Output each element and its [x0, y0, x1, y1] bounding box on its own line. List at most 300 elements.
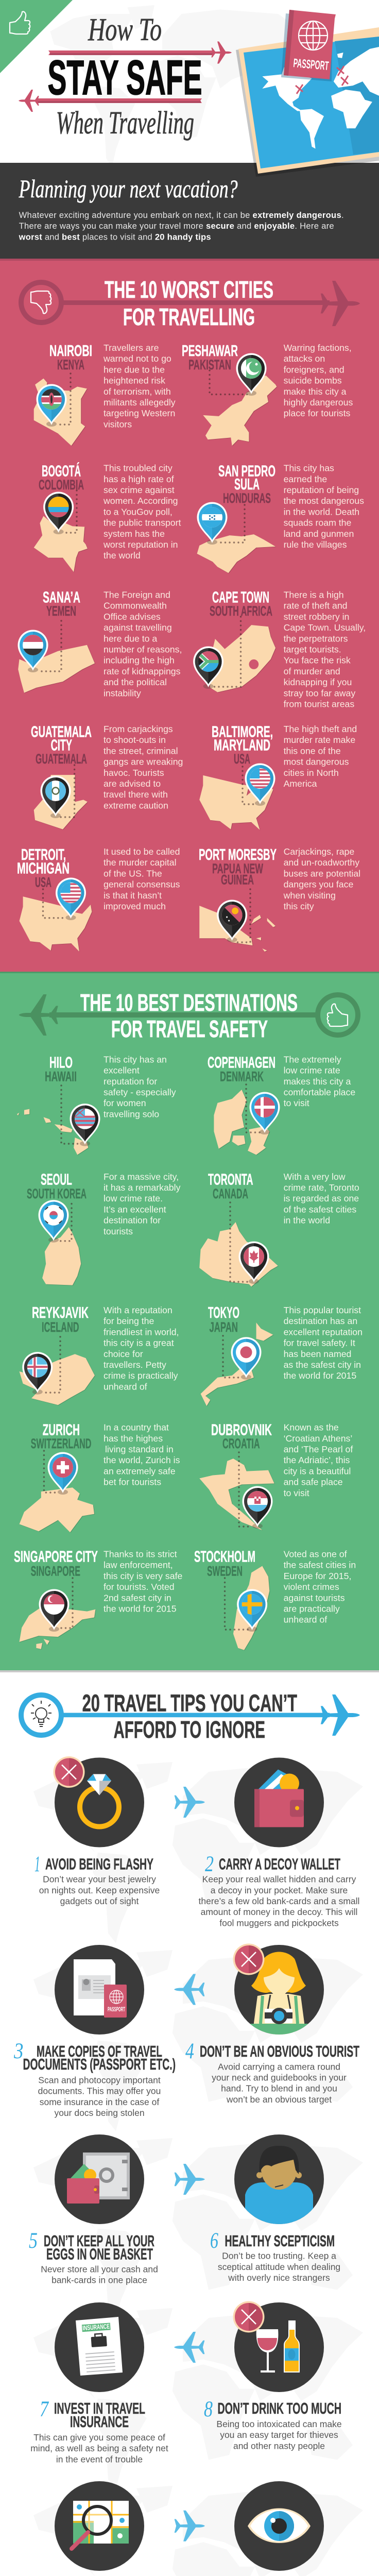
description: rate of kidnappings — [104, 666, 181, 676]
tip 8 — [204, 2397, 342, 2451]
description: extreme caution — [104, 800, 168, 810]
map of Kenya — [34, 379, 87, 446]
description: worst reputation in — [103, 539, 178, 550]
plane — [175, 2164, 205, 2195]
city: Cape Town — [193, 588, 366, 709]
map markers — [296, 66, 348, 94]
description: sex crime against — [104, 485, 175, 495]
description: buses are potential — [284, 868, 360, 878]
flag pin — [236, 353, 267, 396]
flag pin — [245, 764, 275, 806]
description: reputation of being — [284, 485, 359, 495]
mini passport — [104, 1985, 127, 2018]
flag pin — [47, 1452, 78, 1495]
description: place for tourists — [284, 408, 351, 418]
country: SOUTH KOREA — [27, 1186, 87, 1201]
title line: STAY SAFE: STAY SAFE — [47, 50, 202, 105]
tip title line 2: INSURANCE — [70, 2413, 129, 2431]
country: PAKISTAN — [188, 357, 231, 372]
tip text: Avoid carrying a camera round — [218, 2061, 340, 2072]
tip text: Being too intoxicated can make — [216, 2419, 342, 2429]
tip 2 — [199, 1852, 359, 1928]
description: travellers. Petty — [104, 1360, 166, 1370]
description: of the US. The — [104, 868, 162, 878]
description: to visit — [284, 1098, 309, 1108]
description: unheard of — [284, 1615, 327, 1625]
map of Japan — [201, 1323, 273, 1406]
description: The high theft and — [284, 724, 357, 734]
tip text: on nights out. Keep expensive — [39, 1885, 160, 1895]
flag pin — [22, 1352, 53, 1395]
description: The extremely — [284, 1054, 341, 1064]
flag pin — [43, 492, 74, 534]
description: instability — [104, 688, 141, 698]
city name: SAN PEDRO — [218, 462, 275, 480]
city name: BALTIMORE, — [212, 723, 273, 741]
description: In a country that — [104, 1422, 169, 1433]
description: This city has an — [104, 1054, 167, 1064]
description: has a high rate of — [104, 474, 174, 484]
map of Croatia — [199, 1459, 274, 1530]
icon: decoy wallet — [234, 1758, 324, 1848]
description: Office advises — [104, 612, 161, 622]
description: America — [284, 778, 317, 789]
city: Copenhagen — [208, 1054, 355, 1155]
tip text: fool muggers and pickpockets — [219, 1918, 339, 1928]
description: and un-roadworthy — [284, 857, 359, 868]
tip title: DON’T KEEP ALL YOUR — [44, 2232, 154, 2250]
description: of terrorism, with — [104, 386, 171, 397]
description: bet for tourists — [104, 1477, 161, 1487]
description: destination for — [104, 1215, 161, 1226]
country: USA — [234, 751, 250, 767]
world map illustration — [236, 10, 379, 177]
city name: CAPE TOWN — [212, 588, 269, 606]
city: Baltimore — [199, 723, 357, 830]
description: the most dangerous — [284, 496, 364, 506]
description: excellent reputation — [284, 1327, 363, 1337]
icon: sceptical man — [234, 2134, 324, 2224]
heading text line 2: AFFORD TO IGNORE — [114, 1716, 265, 1743]
map of Yemen — [18, 645, 95, 693]
number: 8 — [204, 2397, 213, 2421]
description: destination has an — [284, 1316, 357, 1326]
heading: worst cities — [21, 276, 360, 330]
description: this city is very safe — [104, 1571, 182, 1581]
city: Stockholm — [194, 1548, 356, 1650]
description: to visit — [284, 1488, 309, 1498]
tip text: bank-cards in one place — [51, 2275, 147, 2285]
tip 7 — [30, 2397, 168, 2464]
description: the murder capital — [104, 857, 177, 868]
city: Hilo — [17, 1054, 176, 1155]
map of Sweden — [233, 1566, 269, 1650]
description: and the political — [104, 677, 167, 687]
description: 2nd safest city in — [104, 1592, 171, 1603]
map of Iceland — [20, 1354, 95, 1405]
tip title line 2: DOCUMENTS (PASSPORT ETC.) — [23, 2055, 176, 2073]
tip 1 — [35, 1852, 160, 1906]
description: for travel safety. It — [284, 1338, 355, 1348]
description: travel there with — [104, 789, 168, 800]
description: Carjackings, rape — [284, 846, 354, 857]
tip title: AVOID BEING FLASHY — [45, 1855, 153, 1873]
tip text: mind, as well as being a safety net — [30, 2443, 168, 2453]
flag pin — [217, 900, 247, 942]
icon: globe — [299, 21, 328, 50]
description: for being the — [104, 1316, 154, 1326]
description: murder rate make — [284, 735, 355, 745]
description: here due to the — [104, 364, 165, 375]
city: Tokyo — [201, 1303, 363, 1406]
description: Warring factions, — [284, 343, 352, 353]
description: crime rate, Toronto — [284, 1182, 359, 1193]
tip title: INVEST IN TRAVEL — [54, 2399, 145, 2417]
city name: DUBROVNIK — [211, 1421, 272, 1439]
flag pin — [237, 1589, 267, 1632]
icon: safe and wallet — [55, 2134, 144, 2224]
country: ICELAND — [42, 1319, 79, 1335]
city: Bogota — [34, 462, 181, 572]
description: gangs are wreaking — [104, 757, 183, 767]
country: PAPUA NEW — [212, 861, 263, 876]
tip title: MAKE COPIES OF TRAVEL — [37, 2042, 162, 2060]
country: KENYA — [57, 357, 84, 372]
plane — [321, 281, 360, 326]
city name: PORT MORESBY — [199, 845, 277, 863]
country: HONDURAS — [223, 490, 271, 506]
description: Thanks to its strict — [104, 1549, 177, 1559]
city name: TORONTA — [208, 1171, 253, 1189]
city: Reykjavik — [20, 1303, 179, 1405]
description: From carjackings — [104, 724, 173, 734]
description: rate of theft and — [284, 601, 348, 611]
description: choice for — [104, 1349, 143, 1359]
faint world map watermark — [50, 5, 298, 167]
description: unheard of — [104, 1381, 147, 1392]
icon: insurance document — [55, 2302, 144, 2392]
description: are practically — [284, 1603, 340, 1614]
city: Peshawar — [182, 342, 353, 446]
bottom ribbon with plane — [19, 90, 202, 112]
city name line 2: CITY — [51, 736, 72, 754]
description: highly dangerous — [284, 397, 353, 408]
description: comfortable place — [284, 1087, 355, 1097]
city: San Pedro Sula — [197, 462, 364, 573]
description: city is a beautiful — [284, 1466, 351, 1476]
flag pin — [38, 1200, 69, 1243]
description: It’s an excellent — [104, 1204, 166, 1214]
map of Hawaii — [17, 1109, 88, 1155]
tip 5 — [29, 2229, 158, 2285]
tip text: Don’t be too trusting. Keep a — [222, 2251, 336, 2261]
tip text: documents. This may offer you — [38, 2086, 161, 2096]
description: women. According — [103, 496, 178, 506]
city name: ZURICH — [43, 1421, 80, 1439]
tip text: your docs being stolen — [54, 2108, 145, 2118]
intro text: There are ways you can make your travel more secure and enjoyable. Here are — [19, 221, 334, 231]
intro heading: Planning your next vacation? — [19, 174, 238, 203]
route dots — [210, 370, 247, 395]
tip text: sceptical attitude when dealing — [218, 2262, 340, 2272]
tip text: Never store all your cash and — [41, 2264, 158, 2274]
description: With a reputation — [104, 1305, 173, 1315]
icon: light bulb — [21, 1695, 61, 1735]
map of Singapore — [20, 1607, 95, 1649]
description: kidnapping if you — [284, 677, 352, 687]
city name: SANA’A — [43, 588, 80, 606]
route dots — [246, 1084, 260, 1132]
tip text: Scan and photocopy important — [38, 2075, 161, 2085]
description: Europe for 2015, — [284, 1571, 351, 1581]
description: heightened risk — [104, 376, 165, 386]
flag pin — [18, 630, 48, 672]
route dots — [61, 765, 75, 817]
description: to a YouGov poll, — [104, 506, 173, 517]
description: is regarded as one — [284, 1193, 359, 1204]
description: for tourists. Voted — [104, 1582, 175, 1592]
intro band — [0, 163, 379, 259]
description: ‘Croatian Athens’ — [284, 1433, 352, 1444]
description: of the safest cities — [284, 1204, 356, 1214]
tip text: some insurance in the case of — [40, 2097, 159, 2107]
flag pin — [70, 1104, 100, 1146]
tip text: This can give you some peace of — [33, 2432, 165, 2443]
city name line 2: SULA — [234, 475, 260, 493]
route dots — [42, 1337, 60, 1393]
tip 3 — [13, 2039, 176, 2118]
description: in the world — [284, 1215, 330, 1226]
passport label: PASSPORT — [292, 56, 330, 73]
flag pin — [40, 776, 71, 818]
city name: HILO — [49, 1054, 73, 1072]
description: The Foreign and — [104, 589, 170, 600]
description: make this city a — [284, 386, 347, 397]
description: visitors — [104, 419, 132, 429]
country: SINGAPORE — [31, 1563, 80, 1579]
tips row 4 — [30, 2301, 363, 2489]
map of Canada — [199, 1222, 278, 1286]
tip text: gadgets out of sight — [60, 1896, 139, 1906]
description: low crime rate. — [104, 1193, 163, 1204]
description: the world for 2015 — [284, 1370, 356, 1381]
description: has been named — [284, 1349, 351, 1359]
route dots — [61, 1086, 80, 1144]
city name: SEOUL — [41, 1171, 72, 1189]
description: it has a remarkably — [104, 1182, 181, 1193]
icon: thumbs up — [10, 12, 30, 34]
map of Pakistan — [203, 376, 277, 446]
description: cities in North — [284, 768, 339, 778]
description: warned not to go — [103, 353, 171, 364]
map of Papua New Guinea — [199, 906, 275, 952]
description: Travellers are — [104, 343, 159, 353]
description: of murder and — [284, 666, 340, 676]
plane — [19, 994, 58, 1036]
flag pin — [239, 1242, 269, 1284]
city: Guatemala City — [31, 723, 183, 829]
city name: DETROIT, — [21, 845, 66, 863]
description: It used to be called — [104, 846, 180, 857]
description: You face the risk — [284, 655, 351, 666]
description: improved much — [104, 901, 166, 911]
country: SWITZERLAND — [31, 1436, 91, 1451]
route dots — [57, 374, 71, 425]
description: tourists — [104, 1226, 133, 1236]
route dots — [44, 1451, 58, 1493]
header background — [0, 0, 379, 163]
panel: 10 best destinations — [0, 972, 379, 1670]
tip text: won’t be an obvious target — [226, 2094, 332, 2105]
map of Guatemala — [34, 775, 88, 829]
icon: document copies — [55, 1945, 144, 2035]
number: 3 — [13, 2039, 24, 2063]
description: the world for 2015 — [104, 1603, 177, 1614]
icon: obvious tourist — [233, 1943, 324, 2037]
icon: wine and beer — [233, 2301, 324, 2392]
tip text: your neck and guidebooks in your — [212, 2072, 347, 2082]
description: this city is a great — [104, 1338, 174, 1348]
description: number of reasons, — [104, 644, 182, 654]
mini passport: PASSPORT — [108, 2006, 125, 2013]
description: here due to a — [104, 633, 157, 643]
description: For a massive city, — [104, 1172, 179, 1182]
description: reputation for — [104, 1076, 157, 1087]
description: rule the villages — [284, 539, 347, 550]
country line 2: GUINEA — [221, 872, 254, 887]
tip text: Keep your real wallet hidden and carry — [202, 1874, 356, 1885]
description: an extremely safe — [104, 1466, 176, 1476]
tip text: you an easy target for thieves — [220, 2430, 338, 2440]
description: There is a high — [284, 589, 344, 600]
map of Denmark — [214, 1090, 269, 1155]
description: the world — [104, 550, 141, 561]
icon: insurance document: INSURANCE — [82, 2322, 110, 2332]
tip text: in the event of trouble — [56, 2454, 143, 2464]
country: USA — [35, 875, 51, 890]
map of Colombia — [34, 516, 88, 572]
description: Known as the — [284, 1422, 339, 1433]
route dots — [212, 617, 241, 687]
country: DENMARK — [220, 1069, 264, 1084]
description: Voted as one of — [284, 1549, 347, 1559]
city: Detroit — [17, 845, 180, 952]
country: CROATIA — [222, 1436, 260, 1451]
description: makes this city a — [284, 1076, 351, 1087]
country: CANADA — [213, 1186, 248, 1201]
plane — [175, 2511, 205, 2541]
country: SWEDEN — [207, 1563, 243, 1579]
description: this city — [284, 901, 314, 911]
tip text: amount of money in the decoy. This will — [201, 1907, 357, 1917]
map of South Korea — [42, 1227, 81, 1285]
tip title line 2: EGGS IN ONE BASKET — [46, 2245, 153, 2263]
description: travelling solo — [104, 1109, 159, 1119]
description: militants allegedly — [104, 397, 176, 408]
description: and safe place — [284, 1477, 343, 1487]
city name line 2: MICHIGAN — [17, 859, 70, 877]
description: street robbery in — [284, 612, 349, 622]
city name: BOGOTÁ — [42, 462, 81, 480]
plane — [174, 1974, 204, 2005]
tip text: hand. Try to blend in and you — [221, 2083, 337, 2094]
flag pin — [39, 1589, 69, 1632]
route dots — [223, 1336, 242, 1378]
continents — [262, 47, 379, 149]
green corner with thumb up — [0, 0, 73, 73]
route dots — [230, 1202, 250, 1282]
icon: eye — [234, 2481, 324, 2571]
number: 6 — [210, 2229, 218, 2253]
route dots — [63, 490, 77, 533]
description: violent crimes — [284, 1582, 339, 1592]
route dots — [217, 505, 245, 543]
description: to shoot-outs in — [104, 735, 166, 745]
map of Switzerland — [20, 1487, 94, 1532]
description: living standard in — [105, 1444, 174, 1454]
description: against tourists — [284, 1592, 345, 1603]
tip text: with overly nice strangers — [228, 2273, 330, 2283]
plane — [321, 1694, 360, 1736]
description: are advised to — [104, 778, 161, 789]
panel: 10 worst cities — [0, 259, 379, 972]
description: as the safest city in — [284, 1360, 361, 1370]
intro text: worst and best places to visit and 20 handy tips — [19, 232, 211, 242]
flag pin — [249, 1092, 280, 1134]
country: SOUTH AFRICA — [210, 603, 272, 619]
route dots — [43, 889, 66, 918]
description: friendliest in world, — [104, 1327, 179, 1337]
plane — [174, 2332, 204, 2363]
city name: STOCKHOLM — [194, 1548, 255, 1566]
country: JAPAN — [209, 1319, 238, 1335]
heading text line 2: FOR TRAVEL SAFETY — [111, 1015, 268, 1042]
description: With a very low — [284, 1172, 346, 1182]
route dots — [38, 621, 61, 671]
description: land and gunmen — [284, 529, 354, 539]
description: This troubled city — [104, 463, 173, 473]
tip 4 — [185, 2039, 359, 2105]
city name: GUATEMALA — [31, 723, 92, 741]
flag pin — [36, 384, 67, 427]
tips row 1 — [33, 1756, 363, 1943]
flag pin — [197, 502, 228, 545]
description: stray too far away — [284, 688, 355, 698]
city: Singapore City — [14, 1548, 182, 1649]
description: including the high — [104, 655, 175, 666]
plane — [175, 1787, 205, 1818]
city: Nairobi — [34, 342, 176, 446]
description: against travelling — [104, 622, 172, 633]
description: the safest cities in — [284, 1560, 356, 1570]
tips row 3 — [29, 2134, 363, 2319]
description: and ‘The Pearl of — [284, 1444, 353, 1454]
description: for women — [104, 1098, 146, 1108]
city: Port Moresby — [199, 845, 360, 952]
city name: REYKJAVIK — [32, 1303, 89, 1321]
heading text: THE 10 WORST CITIES — [105, 276, 273, 303]
city name: TOKYO — [208, 1303, 239, 1321]
title line: How To: How To — [88, 12, 162, 47]
description: general consensus — [104, 879, 180, 890]
country: HAWAII — [45, 1069, 77, 1084]
description: when visiting — [283, 890, 336, 901]
heading text line 2: FOR TRAVELLING — [123, 303, 255, 330]
route dots — [225, 1578, 248, 1630]
map of Honduras — [197, 534, 275, 573]
route dots — [58, 1204, 72, 1241]
city: Seoul — [27, 1171, 181, 1285]
